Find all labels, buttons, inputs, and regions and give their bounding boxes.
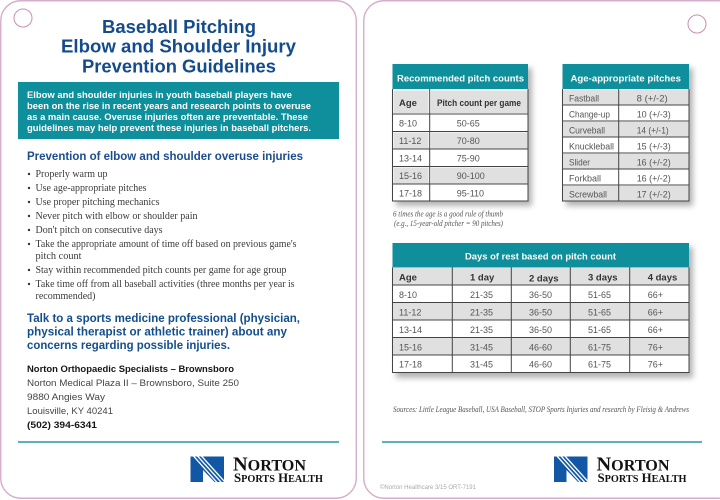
intro callout: guidelines may help prevent these injuries in baseball pitchers. [27, 123, 311, 134]
logo: Norton Sports Health: NORTON [233, 454, 306, 476]
table: days of rest based on pitch count: 66+ [648, 325, 663, 335]
table header: days of rest [392, 243, 689, 268]
table: days of rest based on pitch count: 46-60 [529, 342, 552, 352]
title: Prevention Guidelines [82, 56, 276, 76]
icon: punch hole left [14, 9, 32, 27]
table: age-appropriate pitches: 17 (+/-2) [637, 190, 671, 200]
table: age-appropriate pitches: 10 (+/-3) [637, 110, 671, 120]
table: age-appropriate pitches: 8 (+/-2) [637, 94, 668, 104]
table: age-appropriate pitches: Change-up [569, 110, 610, 120]
table header: days of rest: Days of rest based on pitch count [465, 252, 617, 262]
call to action [27, 311, 300, 352]
table: days of rest based on pitch count: 21-35 [470, 325, 493, 335]
logo: Norton Sports Health (right card): NORTON [596, 454, 670, 476]
table: days of rest based on pitch count: 51-65 [588, 290, 611, 300]
table: recommended pitch counts: 50-65 [457, 118, 480, 128]
rule of thumb note: (e.g., 15-year-old pitcher = 90 pitches) [394, 219, 503, 228]
table: days of rest based on pitch count: 21-35 [470, 308, 493, 318]
table header: age-appropriate pitches: Age-appropriate pitches [570, 74, 681, 84]
table: days of rest based on pitch count: 46-60 [529, 360, 552, 370]
table: recommended pitch counts: 95-110 [457, 188, 484, 198]
copyright: ©Norton Healthcare 3/15 ORT-7191 [380, 484, 477, 491]
table: age-appropriate pitches: Curveball [569, 126, 605, 136]
table: recommended pitch counts: 13-14 [399, 154, 422, 164]
table: days of rest based on pitch count: 36-50 [529, 325, 552, 335]
bullet list: pitch count [36, 250, 82, 262]
table: days of rest based on pitch count: 51-65 [588, 308, 611, 318]
table: recommended pitch counts [392, 64, 532, 206]
contact address: 9880 Angies Way [27, 392, 105, 403]
title: Elbow and Shoulder Injury [61, 36, 297, 56]
table: days of rest based on pitch count: 36-50 [529, 290, 552, 300]
contact address [27, 364, 239, 431]
table: recommended pitch counts: Age [399, 98, 417, 109]
logo: Norton Sports Health (right card) [554, 454, 687, 485]
table: age-appropriate pitches: Fastball [569, 94, 599, 104]
intro callout: Elbow and shoulder injuries in youth baseball players have [27, 90, 292, 101]
table: days of rest based on pitch count: 4 days [648, 272, 677, 284]
table: days of rest based on pitch count: 66+ [648, 308, 663, 318]
table: age-appropriate pitches: Forkball [569, 174, 601, 184]
table: days of rest based on pitch count: 11-12 [399, 308, 421, 318]
table: age-appropriate pitches: 14 (+/-1) [637, 126, 669, 136]
call to action: concerns regarding possible injuries. [27, 338, 230, 352]
table: age-appropriate pitches: 16 (+/-2) [637, 158, 671, 168]
table: days of rest based on pitch count: 17-18 [399, 360, 422, 370]
rule of thumb note [393, 210, 503, 228]
table: recommended pitch counts: 17-18 [399, 188, 422, 198]
call to action: physical therapist or athletic trainer) about any [27, 324, 287, 338]
contact address: Louisville, KY 40241 [27, 406, 113, 417]
table: days of rest based on pitch count: 21-35 [470, 290, 493, 300]
call to action: Talk to a sports medicine professional (physician, [27, 311, 300, 325]
logo: Norton Sports Health [190, 454, 323, 485]
bullet list: recommended) [36, 290, 96, 302]
table: recommended pitch counts: 90-100 [457, 171, 485, 181]
table: age-appropriate pitches: Slider [569, 158, 590, 168]
table: days of rest based on pitch count: 31-45 [470, 342, 493, 352]
table: days of rest based on pitch count: 76+ [648, 342, 663, 352]
bullet list: Properly warm up [36, 168, 108, 180]
bullet list [28, 168, 297, 302]
bullet list: Stay within recommended pitch counts per game for age group [36, 264, 287, 276]
table: recommended pitch counts: Pitch count per game [437, 98, 521, 109]
title [61, 16, 297, 76]
table: days of rest based on pitch count: 76+ [648, 360, 663, 370]
table: age-appropriate pitches: Screwball [569, 190, 607, 200]
table header: recommended pitch counts [392, 64, 528, 89]
bullet list: Never pitch with elbow or shoulder pain [36, 210, 198, 222]
logo: Norton Sports Health (right card): SPORTS HEALTH [598, 471, 687, 485]
table: days of rest based on pitch count: 31-45 [470, 360, 493, 370]
bullet list: Take the appropriate amount of time off based on previous game's [36, 238, 296, 250]
table: days of rest based on pitch count: 15-16 [399, 342, 422, 352]
bullet list: Use proper pitching mechanics [36, 196, 160, 208]
contact address: Norton Medical Plaza II – Brownsboro, Suite 250 [27, 378, 239, 389]
table: days of rest based on pitch count: 3 days [588, 272, 618, 284]
table: days of rest based on pitch count: Age [399, 272, 417, 284]
table: days of rest based on pitch count [392, 243, 693, 378]
table: days of rest based on pitch count: 51-65 [588, 325, 611, 335]
table: days of rest based on pitch count: 1 day [470, 272, 495, 284]
table: recommended pitch counts: 8-10 [399, 118, 417, 128]
title: Baseball Pitching [102, 16, 256, 37]
table: recommended pitch counts: 11-12 [399, 136, 421, 146]
bullet list: Don't pitch on consecutive days [36, 224, 162, 236]
bullet list: Use age-appropriate pitches [36, 182, 146, 194]
bullet list: Take time off from all baseball activities (three months per year is [36, 278, 294, 290]
logo: Norton Sports Health: SPORTS HEALTH [234, 471, 323, 485]
table: recommended pitch counts: 75-90 [457, 154, 480, 164]
table: recommended pitch counts: 70-80 [457, 136, 480, 146]
intro callout: as a main cause. Overuse injuries often are preventable. These [27, 112, 308, 123]
panel: left card [1, 1, 356, 498]
table: days of rest based on pitch count: 61-75 [588, 342, 611, 352]
table: days of rest based on pitch count: 36-50 [529, 308, 552, 318]
table header: age-appropriate pitches [562, 64, 689, 89]
table: age-appropriate pitches: 16 (+/-2) [637, 174, 671, 184]
table header: recommended pitch counts: Recommended pitch counts [397, 74, 524, 84]
intro callout [18, 82, 339, 139]
table: age-appropriate pitches: Knuckleball [569, 142, 614, 152]
intro callout: been on the rise in recent years and research points to overuse [27, 101, 311, 112]
table: age-appropriate pitches [562, 64, 693, 206]
icon: punch hole right [688, 15, 706, 33]
table: days of rest based on pitch count: 2 days [529, 274, 559, 284]
panel: right card [364, 1, 720, 498]
table: recommended pitch counts: 15-16 [399, 171, 422, 181]
table: age-appropriate pitches: 15 (+/-3) [637, 142, 671, 152]
contact address: (502) 394-6341 [27, 420, 98, 431]
heading: prevention: Prevention of elbow and shoulder overuse injuries [27, 151, 303, 163]
contact address: Norton Orthopaedic Specialists – Brownsboro [27, 364, 234, 375]
table: days of rest based on pitch count: 8-10 [399, 290, 417, 300]
table: days of rest based on pitch count: 61-75 [588, 360, 611, 370]
rule of thumb note: 6 times the age is a good rule of thumb [393, 210, 503, 218]
table: days of rest based on pitch count: 66+ [648, 290, 663, 300]
table: days of rest based on pitch count: 13-14 [399, 325, 422, 335]
